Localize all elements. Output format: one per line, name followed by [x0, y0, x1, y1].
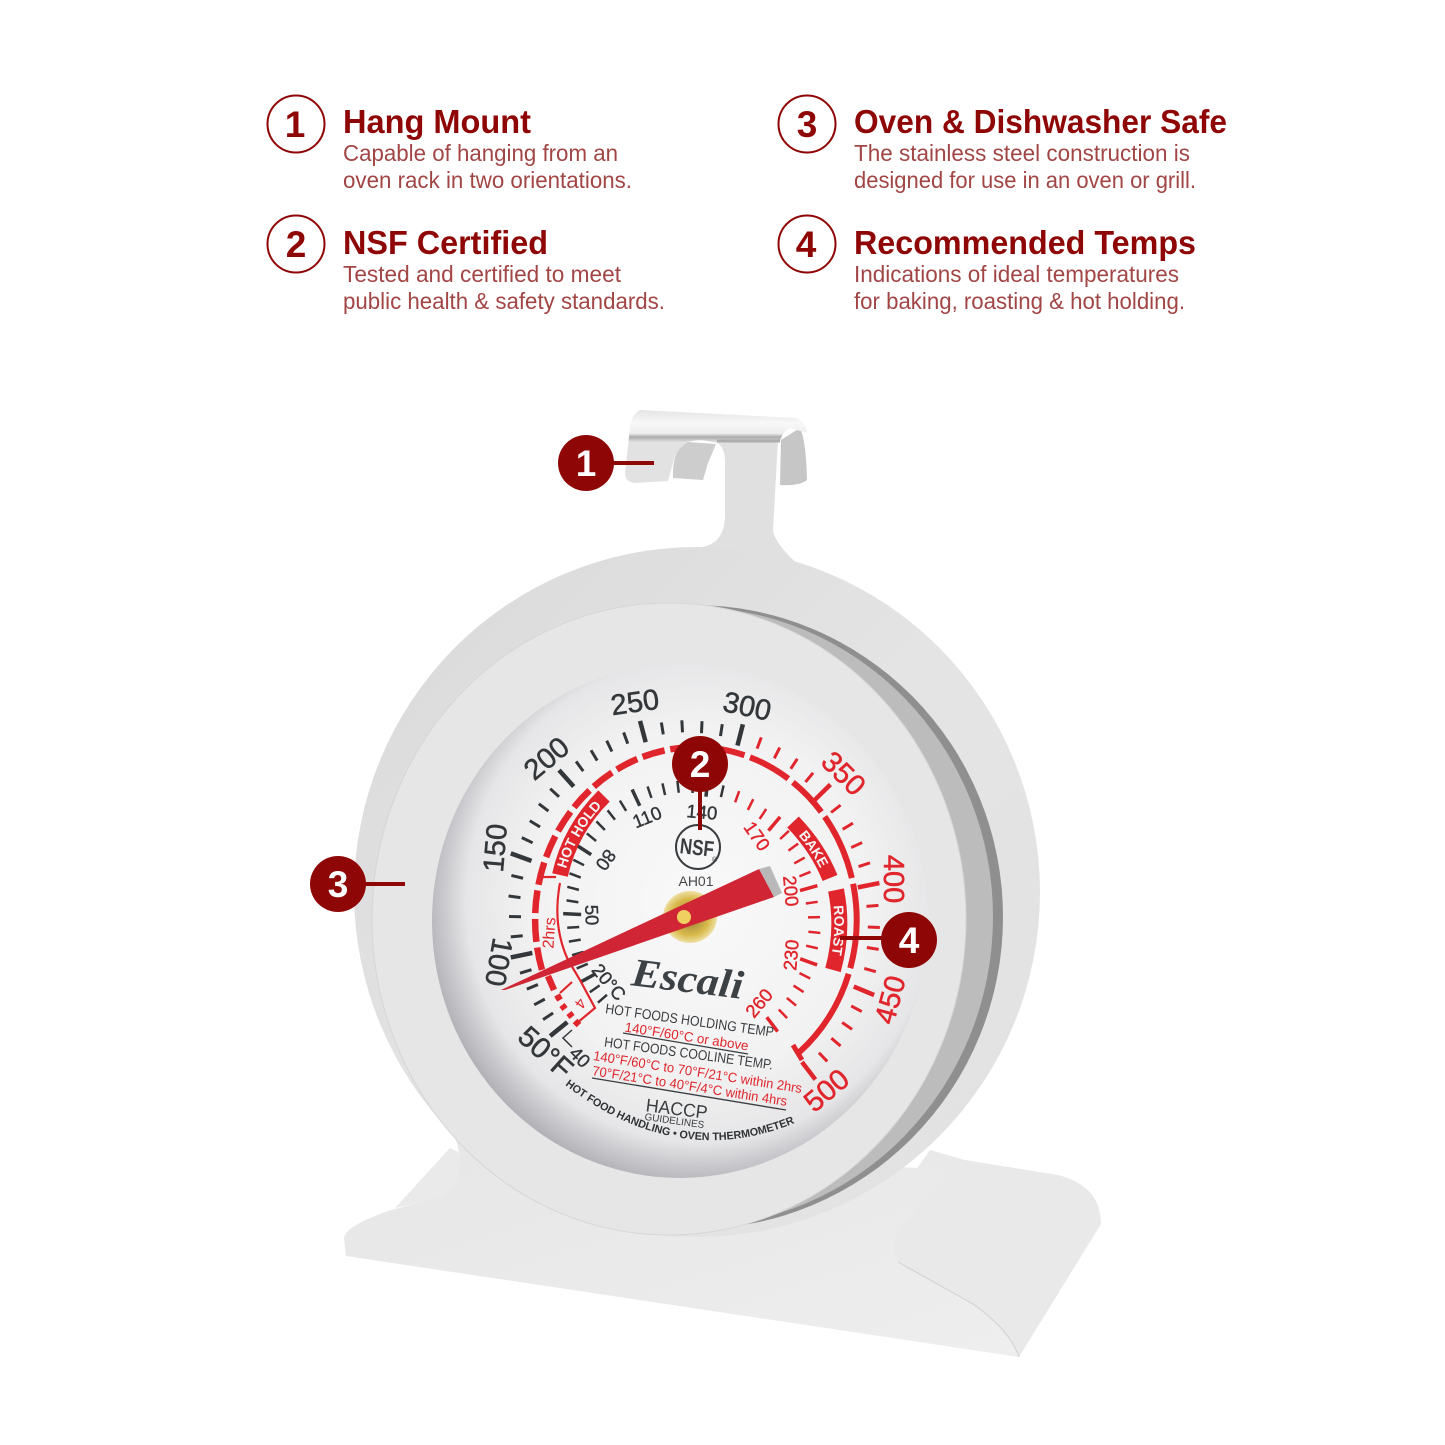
outer scale numbers: black: 150	[478, 823, 514, 873]
legend item 1: Hang Mount: 1	[285, 104, 305, 145]
legend item 2: NSF Certified	[268, 216, 665, 314]
legend item 2: NSF Certified: public health & safety standards.	[343, 288, 665, 314]
callout 1: hang mount	[558, 435, 654, 491]
NSF mark: ®	[712, 856, 718, 864]
model number: AH01	[678, 873, 714, 889]
legend item 3: Oven and Dishwasher Safe: Oven & Dishwasher Safe	[854, 103, 1227, 140]
inner scale numbers: black: 40	[565, 1042, 595, 1072]
callout 3: stainless steel	[310, 856, 405, 912]
red temperature arc: right solid section	[696, 747, 857, 1052]
stand: rear flaps	[395, 1148, 1101, 1357]
legend item 3: Oven and Dishwasher Safe	[778, 96, 1227, 193]
guidelines text block	[591, 1000, 803, 1131]
inner scale numbers: black: 20°C	[588, 959, 630, 1005]
BAKE banner	[787, 816, 838, 881]
guidelines text block: HACCP	[645, 1094, 709, 1123]
ROAST banner: ROAST	[832, 906, 844, 956]
outer scale numbers: red: 450	[869, 972, 913, 1028]
HOT HOLD banner: HOT HOLD	[557, 802, 600, 868]
outer scale numbers: black: 250	[609, 684, 661, 722]
NSF mark: NSF	[679, 833, 715, 862]
legend item 2: NSF Certified: NSF Certified	[343, 224, 548, 261]
hanger hook	[625, 410, 830, 590]
needle pivot	[663, 891, 717, 943]
outer scale numbers: black: 300	[720, 686, 774, 728]
brand logo: Escali	[628, 949, 746, 1008]
BAKE banner: BAKE	[799, 830, 828, 868]
legend item 3: Oven and Dishwasher Safe: The stainless steel construction is	[854, 140, 1190, 166]
callout 3: stainless steel: 3	[328, 864, 348, 905]
bottom scale mark	[563, 1030, 572, 1047]
callout 2: NSF	[672, 736, 728, 830]
NSF mark	[676, 825, 720, 869]
outer scale ticks: red	[757, 737, 880, 1079]
inner scale numbers: black: 80	[591, 846, 621, 874]
round plate	[354, 547, 1040, 1237]
cooling dots	[548, 976, 579, 1025]
outer scale numbers: red	[798, 746, 913, 1119]
legend item 1: Hang Mount: Hang Mount	[343, 103, 531, 140]
outer scale numbers: black: 200	[518, 731, 576, 787]
legend item 4: Recommended Temps: 4	[796, 224, 817, 265]
guidelines text block: GUIDELINES	[644, 1112, 705, 1131]
outer scale numbers: black: 100	[478, 935, 518, 989]
legend item 1: Hang Mount: Capable of hanging from an	[343, 140, 618, 166]
red temperature arc: left dashed section	[535, 747, 693, 970]
outer scale numbers: black	[478, 684, 774, 1086]
outer scale ticks: black	[509, 720, 743, 1036]
dial face	[432, 664, 928, 1178]
legend item 4: Recommended Temps: Recommended Temps	[854, 224, 1196, 261]
legend item 3: Oven and Dishwasher Safe: 3	[797, 104, 817, 145]
stand fold edge	[898, 1262, 1019, 1357]
needle	[501, 866, 782, 990]
front bezel	[372, 603, 966, 1235]
guidelines text block: 140°F/60°C to 70°F/21°C within 2hrs	[592, 1048, 803, 1096]
guidelines text block: 70°F/21°C to 40°F/4°C within 4hrs	[591, 1063, 788, 1109]
2hrs label: 2hrs	[540, 917, 560, 949]
cooling bracket	[542, 877, 595, 1023]
legend item 4: Recommended Temps: for baking, roasting & hot holding.	[854, 288, 1185, 314]
inner scale numbers: black: 50	[581, 904, 603, 926]
outer scale numbers: red: 350	[815, 746, 871, 802]
inner scale numbers: black: 110	[629, 802, 665, 832]
guidelines text block: HOT FOODS HOLDING TEMP	[604, 1000, 775, 1040]
legend item 2: NSF Certified: 2	[286, 224, 306, 265]
inner scale numbers: black	[565, 800, 718, 1072]
steel side band	[385, 605, 1003, 1229]
inner scale numbers: red: 170	[740, 817, 774, 855]
inner scale numbers: black: 140	[686, 800, 718, 824]
thermometer illustration	[344, 410, 1101, 1357]
4hrs label: 4	[571, 995, 589, 1011]
inner scale ticks: black	[563, 779, 724, 1003]
guidelines text block: 140°F/60°C or above	[624, 1020, 750, 1054]
legend item 4: Recommended Temps: Indications of ideal temperatures	[854, 261, 1179, 287]
legend item 2: NSF Certified: Tested and certified to meet	[343, 261, 621, 287]
legend item 1: Hang Mount	[268, 96, 632, 193]
curved caption: HOT FOOD HANDLING • OVEN THERMOMETER	[566, 1079, 794, 1140]
inner scale numbers: red: 230	[779, 939, 803, 971]
inner scale numbers: red: 260	[741, 984, 777, 1022]
legend item 4: Recommended Temps	[778, 216, 1196, 314]
outer scale numbers: red: 400	[877, 855, 909, 903]
inner scale numbers: red	[740, 817, 803, 1022]
ROAST banner	[825, 888, 848, 972]
callout 4: recommended temps: 4	[899, 920, 920, 961]
callout 2: NSF: 2	[690, 744, 710, 785]
legend item 3: Oven and Dishwasher Safe: designed for use in an oven or grill.	[854, 167, 1196, 193]
inner scale ticks: red	[735, 791, 820, 1032]
inner scale numbers: red: 200	[779, 875, 803, 907]
guidelines text block: HOT FOODS COOLINE TEMP.	[603, 1034, 774, 1073]
outer scale numbers: red: 500	[798, 1063, 856, 1119]
stand: front plate	[344, 1140, 1019, 1357]
outer scale numbers: black: 50°F	[511, 1020, 579, 1086]
legend item 1: Hang Mount: oven rack in two orientations.	[343, 167, 632, 193]
callout 1: hang mount: 1	[576, 443, 596, 484]
callout 4: recommended temps	[840, 912, 937, 968]
red arc end cap	[793, 1045, 802, 1060]
